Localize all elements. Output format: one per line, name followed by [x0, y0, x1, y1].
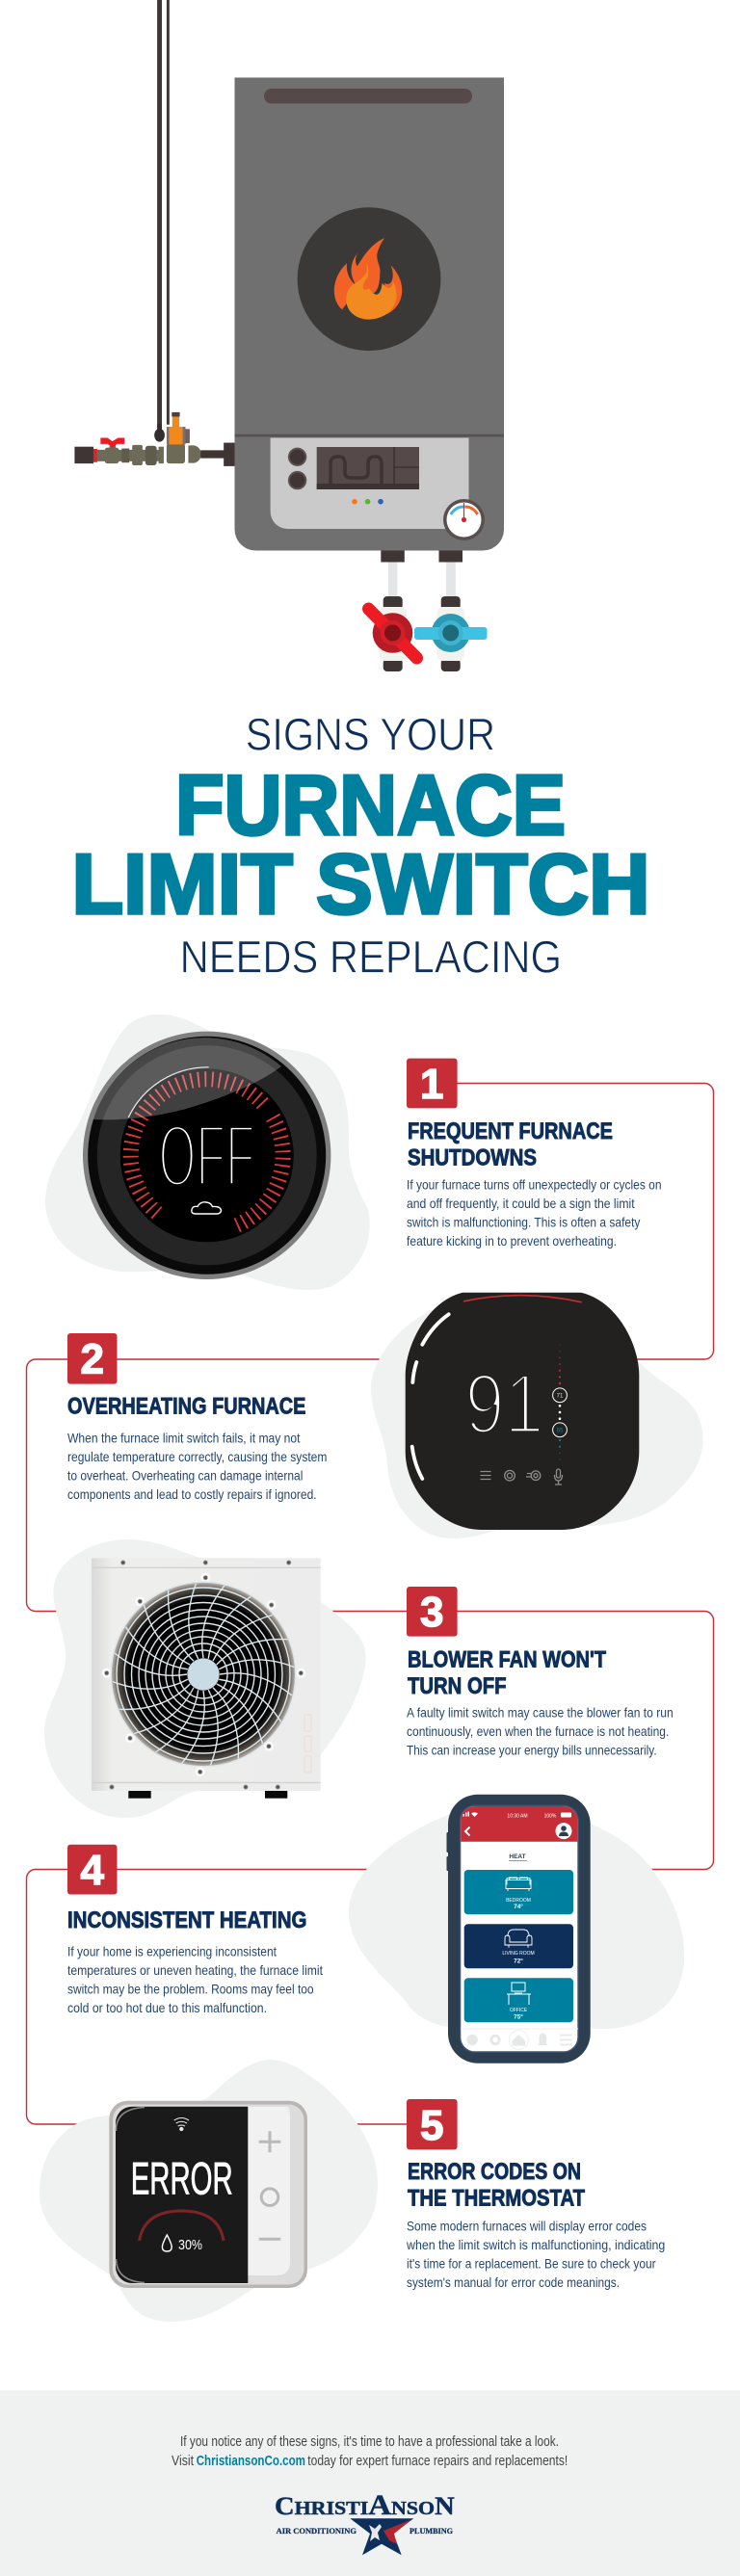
control knobs [289, 449, 305, 488]
status arcs [412, 1296, 581, 1479]
temperature slider: 71 [557, 1393, 564, 1399]
body text 5: it's time for a replacement. Be sure to check your [407, 2256, 656, 2272]
number badge 2 [67, 1333, 118, 1384]
number badge 3 [407, 1587, 458, 1637]
number badge 3: 3 [420, 1589, 444, 1636]
illustration: outdoor fan unit [92, 1558, 321, 1799]
screws [104, 1561, 303, 1789]
room card: office: 75° [514, 2013, 523, 2021]
outlet pipes and valves [368, 551, 488, 671]
heading 1 [408, 1118, 613, 1171]
app header: 100% [544, 1813, 557, 1819]
room card: office: OFFICE [510, 2008, 528, 2013]
logo: Christianson: CHRISTIANSON [275, 2489, 455, 2521]
number badge 5 [407, 2099, 458, 2149]
heading 1: SHUTDOWNS [408, 1145, 537, 1171]
icon: wifi [174, 2117, 189, 2131]
body text 4: If your home is experiencing inconsistent [67, 1943, 277, 1958]
temperature slider [553, 1344, 567, 1460]
divider [235, 434, 504, 437]
illustration: smartphone app [447, 1795, 591, 2063]
screen corner glints [116, 2108, 145, 2283]
body text 5 [406, 2219, 665, 2290]
step 3: blower fan won't turn off [407, 1587, 674, 1757]
heading 5: ERROR CODES ON [408, 2159, 581, 2185]
screw lobes [102, 1573, 305, 1776]
body text 1 [407, 1176, 661, 1249]
room card: bedroom: 74° [514, 1903, 523, 1910]
footer [0, 2390, 740, 2576]
body text 4 [67, 1943, 323, 2015]
dial arc [128, 1067, 209, 1117]
body text 1: switch is malfunctioning. This is often a safety [407, 1214, 640, 1229]
room card: living room: 72° [514, 1958, 523, 1965]
body text 5: when the limit switch is malfunctioning, indicating [406, 2237, 665, 2252]
room card: office [464, 1978, 573, 2022]
pressure gauge [443, 499, 485, 540]
illustration: thermostat showing error [109, 2101, 307, 2288]
red tick dial [131, 1079, 283, 1226]
footer panel [0, 2390, 740, 2576]
body text 1: feature kicking in to prevent overheating. [407, 1233, 617, 1249]
phone shell [447, 1795, 591, 2063]
title line: limit switch: LIMIT SWITCH [71, 836, 649, 932]
control icons [480, 1469, 563, 1485]
body text 4: cold or too hot due to this malfunction. [67, 2000, 267, 2015]
title line: signs your: SIGNS YOUR [246, 709, 495, 759]
OFF readout: OFF [158, 1108, 254, 1205]
body text 3: This can increase your energy bills unnecessarily. [407, 1742, 657, 1757]
furnace body [235, 77, 504, 551]
icon: water drop [162, 2235, 172, 2251]
heading 5: THE THERMOSTAT [408, 2185, 585, 2212]
app header [461, 1806, 577, 1842]
body text 2: regulate temperature correctly, causing the system [67, 1449, 327, 1464]
title line: furnace: FURNACE [175, 757, 566, 853]
glass highlight [93, 1038, 281, 1119]
background blob behind OFF thermostat [45, 1014, 370, 1290]
body text 4: switch may be the problem. Rooms may feel too [67, 1981, 314, 1996]
logo: Christianson: PLUMBING [410, 2527, 453, 2536]
background blob behind phone [349, 1813, 684, 2029]
body text 2: When the furnace limit switch fails, it may not [67, 1430, 301, 1445]
heading 3 [408, 1646, 606, 1699]
background blob behind outdoor unit [44, 1539, 366, 1818]
screen heading: HEAT [509, 1853, 526, 1860]
room card: living room [464, 1924, 573, 1968]
heading 3: TURN OFF [408, 1673, 507, 1699]
icon: flame [334, 238, 402, 320]
bottom navigation [461, 2029, 578, 2050]
error readout: ERROR [131, 2152, 233, 2203]
heading 2: OVERHEATING FURNACE [67, 1393, 305, 1419]
number badge 1 [407, 1059, 458, 1108]
display panel [317, 447, 419, 489]
number badge 1: 1 [420, 1061, 444, 1108]
illustration: furnace [74, 0, 504, 671]
body text 1: If your furnace turns off unexpectedly or cycles on [407, 1176, 661, 1192]
title line: needs replacing: NEEDS REPLACING [180, 931, 562, 982]
heading 1: FREQUENT FURNACE [408, 1118, 613, 1144]
number badge 2: 2 [80, 1335, 104, 1383]
background blob behind digital thermostat [371, 1301, 703, 1538]
illustration: OFF thermostat [83, 1032, 330, 1279]
feet [128, 1791, 287, 1799]
step 1: frequent furnace shutdowns [407, 1059, 661, 1249]
body text 5: system's manual for error code meanings. [407, 2274, 620, 2290]
background blob behind error thermostat [40, 2060, 378, 2322]
logo: Christianson: AIR CONDITIONING [277, 2527, 357, 2536]
plus, circle, minus buttons [259, 2131, 280, 2239]
side vents [304, 1715, 311, 1773]
step 2: overheating furnace [67, 1333, 327, 1502]
step 5: error codes on the thermostat [406, 2099, 665, 2290]
step 4: inconsistent heating [67, 1845, 323, 2015]
heading 5 [408, 2159, 585, 2212]
closing text: today for expert furnace repairs and replacements! [307, 2454, 568, 2469]
closing text: ChristiansonCo.com [197, 2454, 305, 2469]
number badge 5: 5 [420, 2102, 444, 2149]
fan and grille [111, 1582, 296, 1767]
body text 4: temperatures or uneven heating, the furnace limit [67, 1962, 323, 1978]
burner window [298, 207, 440, 351]
heading 4: INCONSISTENT HEATING [67, 1907, 306, 1933]
temperature slider: 65 [557, 1428, 564, 1433]
logo: Christianson [275, 2489, 455, 2555]
body text 2: to overheat. Overheating can damage internal [67, 1467, 303, 1483]
control panel [271, 437, 468, 529]
body text 1: and off frequently, it could be a sign the limit [407, 1196, 635, 1211]
number badge 4: 4 [80, 1847, 104, 1894]
device shell [109, 2101, 307, 2288]
room card: bedroom: BEDROOM [506, 1898, 531, 1904]
thermostat body [406, 1293, 639, 1530]
body text 3 [407, 1705, 674, 1757]
title [71, 709, 649, 982]
humidity value: 30% [178, 2237, 202, 2253]
bezel [83, 1032, 330, 1279]
body text 3: A faulty limit switch may cause the blower fan to run [407, 1705, 674, 1721]
body text 3: continuously, even when the furnace is not heating. [407, 1723, 669, 1739]
illustration: digital thermostat reading 91 [406, 1293, 639, 1530]
connector line linking the five steps [27, 1083, 714, 2124]
gas pipes [74, 0, 235, 466]
temperature readout: 91 [464, 1356, 543, 1451]
indicator lights [352, 499, 383, 505]
room card: living room: LIVING ROOM [502, 1951, 535, 1957]
app header: 10:30 AM [507, 1813, 528, 1819]
closing text: Visit [172, 2454, 194, 2469]
body text 2: components and lead to costly repairs if ignored. [67, 1486, 317, 1502]
closing text: If you notice any of these signs, it's time to have a professional take a look. [180, 2434, 559, 2450]
room card: bedroom [464, 1870, 573, 1914]
icon: cloud [192, 1202, 222, 1214]
humidity arc [139, 2211, 224, 2241]
closing text [172, 2434, 568, 2469]
number badge 4 [67, 1845, 118, 1894]
body text 5: Some modern furnaces will display error codes [407, 2219, 647, 2234]
cabinet [92, 1558, 321, 1791]
top vent slot [264, 89, 472, 104]
heading 3: BLOWER FAN WON'T [408, 1646, 606, 1672]
body text 2 [67, 1430, 327, 1502]
